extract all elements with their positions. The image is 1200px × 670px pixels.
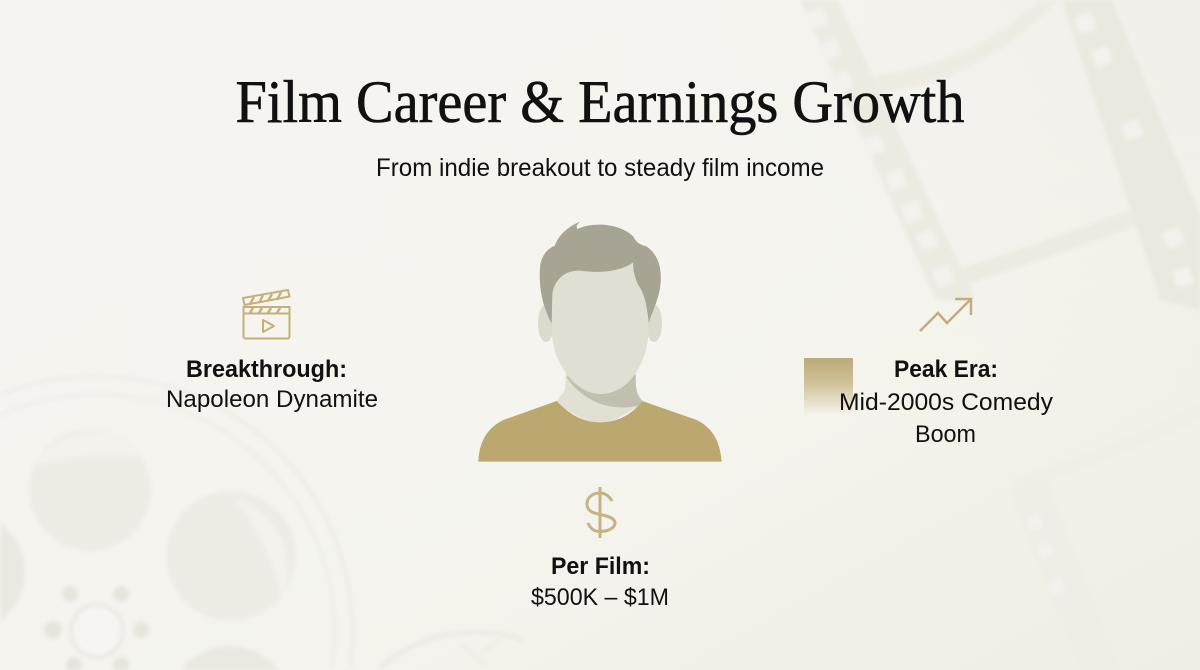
neck	[555, 372, 644, 428]
shirt	[478, 401, 722, 462]
hair	[540, 222, 661, 323]
text: per film: Per Film:	[551, 553, 650, 580]
ears	[538, 305, 662, 342]
text: breakthrough: Napoleon Dynamite	[166, 386, 378, 413]
text: peak era: Boom	[915, 421, 976, 448]
subtitle: From indie breakout to steady film income	[376, 154, 824, 182]
icon: dollar sign	[587, 487, 615, 538]
face	[552, 255, 648, 394]
film reel watermark	[0, 376, 524, 670]
title: Film Career & Earnings Growth	[236, 69, 964, 135]
text: per film: $500K – $1M	[531, 584, 669, 611]
text: peak era: Mid-2000s Comedy	[839, 389, 1053, 416]
text: breakthrough: Breakthrough:	[186, 356, 347, 383]
central person silhouette	[478, 222, 722, 462]
text: breakthrough	[166, 356, 378, 413]
gradient square	[804, 358, 853, 414]
text: peak era: Peak Era:	[894, 356, 998, 383]
film strip watermark	[800, 0, 1200, 670]
icon: trend arrow	[920, 299, 971, 331]
icon: clapperboard	[243, 290, 290, 338]
background corner tint	[700, 0, 1200, 400]
text: peak era	[839, 356, 1053, 448]
neck shadow	[566, 375, 643, 407]
text: per film	[531, 553, 669, 611]
